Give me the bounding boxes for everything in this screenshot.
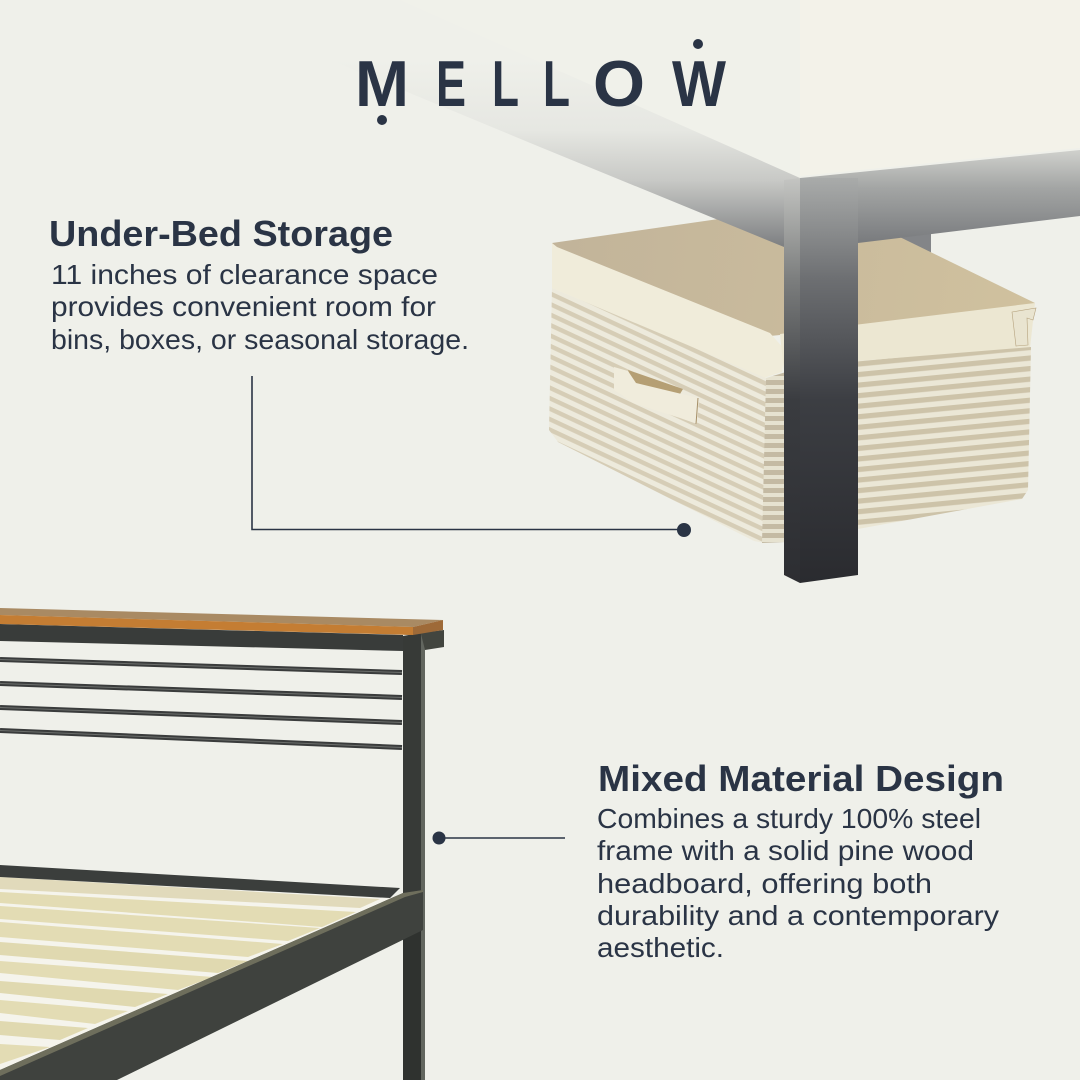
text block: material description: frame with a solid pine wood xyxy=(597,835,974,866)
front leg front face xyxy=(800,178,858,583)
box left cream band xyxy=(552,243,785,378)
box corner striped face xyxy=(762,372,786,543)
rear low rail xyxy=(0,865,400,898)
logo: MELLOW: W xyxy=(672,47,727,120)
logo: MELLOW: M xyxy=(355,47,409,120)
headboard post xyxy=(403,632,425,895)
right side rail xyxy=(800,150,1080,243)
logo: MELLOW xyxy=(355,39,727,125)
text block: material description xyxy=(597,803,999,963)
logo: MELLOW: L xyxy=(543,47,570,120)
image: top bed frame xyxy=(335,0,1080,583)
left side rail xyxy=(335,0,800,247)
wood headboard top xyxy=(0,608,443,635)
text block: storage description: provides convenient room for xyxy=(51,291,436,322)
callout: material leader line xyxy=(432,832,565,844)
box handle xyxy=(614,367,699,424)
headboard slim bars xyxy=(0,660,402,748)
image: under-bed storage box xyxy=(549,203,1036,543)
headboard top rail xyxy=(0,624,403,651)
image: headboard and bed frame xyxy=(0,608,444,1080)
callout: storage leader line xyxy=(252,376,691,537)
text block: material description: headboard, offering both xyxy=(597,868,932,899)
side rail xyxy=(0,890,423,1080)
logo: MELLOW: E xyxy=(436,47,466,120)
image: top bed mattress corner xyxy=(387,0,1080,178)
text block: storage description: bins, boxes, or seasonal storage. xyxy=(51,324,469,355)
text block: storage description: 11 inches of clearance space xyxy=(51,259,438,290)
heading: Mixed Material Design: Mixed Material Design xyxy=(598,758,1004,799)
box left striped face xyxy=(549,288,766,543)
box right cream band xyxy=(780,303,1035,372)
text block: storage description xyxy=(51,259,469,355)
logo: MELLOW: O xyxy=(593,47,645,120)
front leg side face xyxy=(784,178,800,583)
text block: material description: durability and a contemporary xyxy=(597,900,999,931)
text block: material description: Combines a sturdy 100% steel xyxy=(597,803,981,834)
box lid interior xyxy=(552,203,1035,336)
box tag corner xyxy=(1012,308,1036,346)
image: rear bed leg xyxy=(888,232,931,266)
box right striped face xyxy=(858,347,1031,529)
logo: MELLOW: L xyxy=(492,47,519,120)
bed slats xyxy=(0,877,395,1070)
text block: material description: aesthetic. xyxy=(597,932,724,963)
heading: Under-Bed Storage: Under-Bed Storage xyxy=(49,213,393,254)
